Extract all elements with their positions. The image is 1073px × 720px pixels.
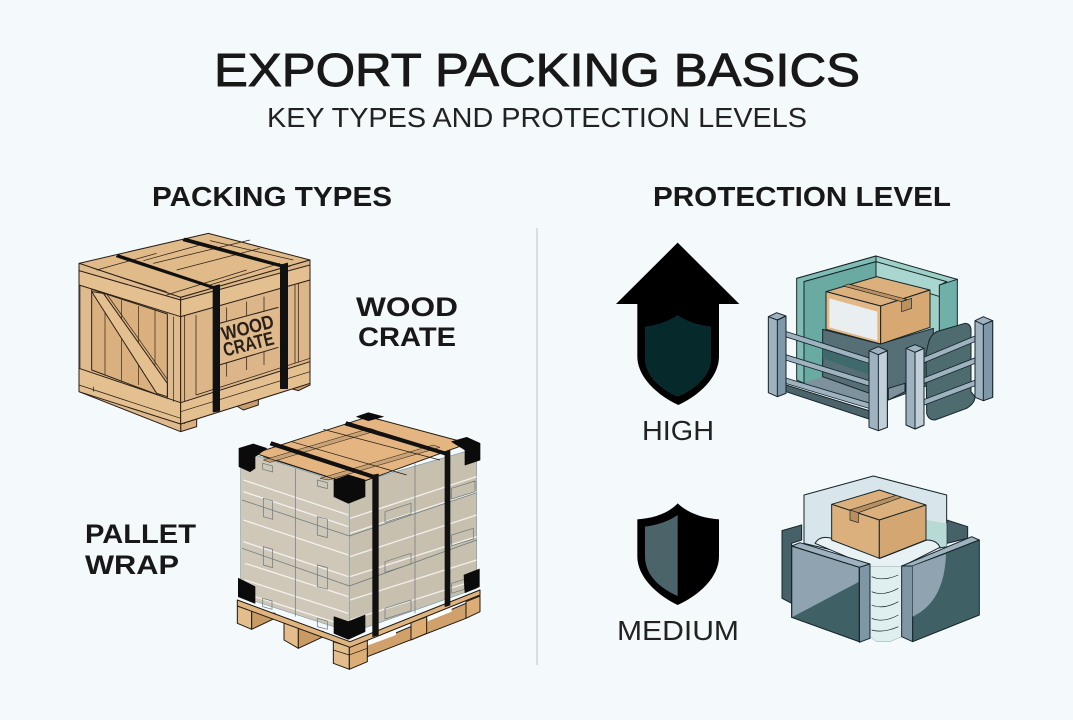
title: EXPORT PACKING BASICS <box>214 44 860 96</box>
crate label: WOOD <box>219 312 276 346</box>
crate label <box>219 312 276 362</box>
subtitle: KEY TYPES AND PROTECTION LEVELS <box>267 102 807 133</box>
label: pallet: PALLET <box>85 519 197 549</box>
label: wrap: WRAP <box>85 550 179 580</box>
label: medium: MEDIUM <box>617 615 739 646</box>
illustration: medium protection foam box <box>782 476 979 642</box>
icon: medium protection shield <box>637 503 719 605</box>
heading: protection level: PROTECTION LEVEL <box>653 181 951 212</box>
illustration: wood crate <box>79 233 310 432</box>
illustration: pallet wrap <box>237 413 480 669</box>
illustration: high protection cage <box>768 256 993 431</box>
crate label: CRATE <box>221 329 276 362</box>
label: high: HIGH <box>642 415 714 446</box>
pallet <box>237 590 480 669</box>
label: crate: CRATE <box>358 322 456 352</box>
icon: high protection arrow shield <box>616 243 739 405</box>
corner protectors <box>238 413 480 639</box>
fence rails <box>783 333 978 406</box>
heading: packing types: PACKING TYPES <box>152 181 392 212</box>
fence posts <box>768 313 993 431</box>
label: wood crate: WOOD <box>356 292 458 322</box>
